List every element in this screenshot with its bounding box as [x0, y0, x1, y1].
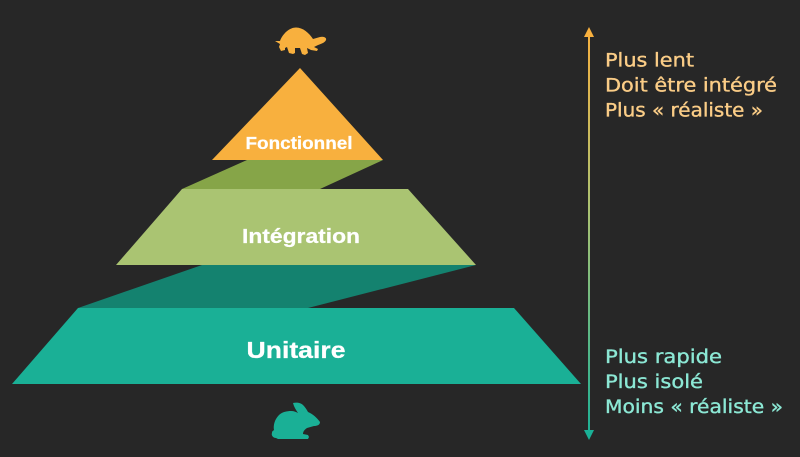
- connector: functional to integration: [182, 160, 383, 189]
- tier: Unitaire: Unitaire: [246, 337, 346, 363]
- tier: Unitaire: [12, 308, 581, 384]
- text block: fast end: Plus isolé: [605, 372, 703, 393]
- tier: Fonctionnel: Fonctionnel: [246, 133, 352, 153]
- text block: fast end: [605, 347, 783, 418]
- connector: integration to unit: [78, 265, 476, 308]
- tier: Fonctionnel: [212, 68, 383, 160]
- icon: turtle: [275, 28, 326, 55]
- text block: slow end: Plus « réaliste »: [605, 100, 763, 122]
- tier: Intégration: Intégration: [242, 225, 360, 248]
- icon: rabbit: [272, 403, 320, 439]
- text block: fast end: Moins « réaliste »: [605, 397, 783, 418]
- text block: slow end: Doit être intégré: [605, 76, 777, 96]
- tier: Intégration: [116, 189, 476, 265]
- text block: fast end: Plus rapide: [605, 347, 722, 368]
- vertical axis arrow: [584, 27, 594, 440]
- text block: slow end: [605, 50, 777, 122]
- pyramid: [12, 68, 581, 384]
- text block: slow end: Plus lent: [605, 50, 694, 72]
